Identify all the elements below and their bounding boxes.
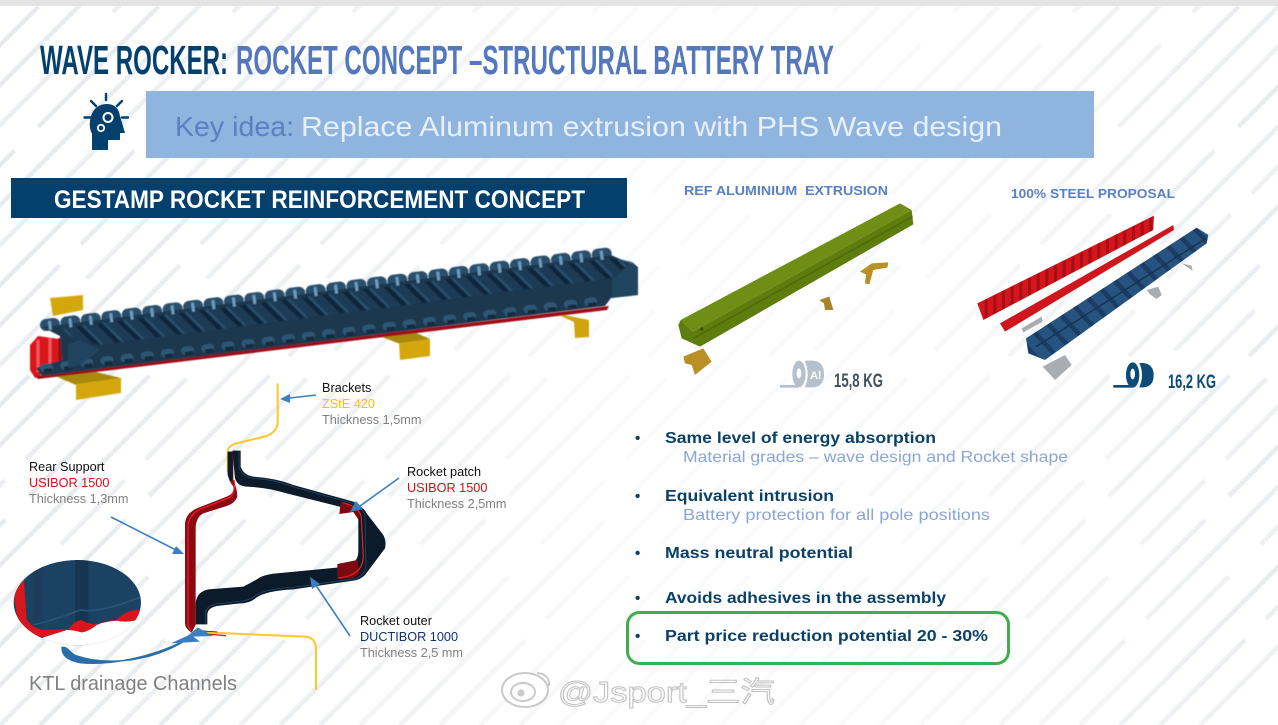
rocket reinforcement 3D render xyxy=(29,246,639,401)
weight: aluminium: 15,8 KG xyxy=(834,371,883,392)
watermark: @Jsport_三汽 xyxy=(558,676,775,709)
benefits list: Part price reduction potential 20 - 30% xyxy=(665,628,988,645)
curved arrow to drainage channel xyxy=(62,627,213,663)
bracket profile upper xyxy=(228,383,278,472)
label: KTL drainage channels: KTL drainage Channels xyxy=(29,673,237,695)
section banner xyxy=(11,178,627,218)
label: rear support: Rear Support xyxy=(29,460,105,474)
cross section diagram xyxy=(185,383,386,690)
benefits list xyxy=(635,430,1068,645)
label: rear support: USIBOR 1500 xyxy=(29,476,109,490)
benefits list: Avoids adhesives in the assembly xyxy=(665,590,946,607)
title: ROCKET CONCEPT –STRUCTURAL BATTERY TRAY xyxy=(236,37,834,83)
rocket patch section xyxy=(339,502,360,520)
heading: reference aluminium: REF ALUMINIUM EXTRUSION xyxy=(684,183,888,198)
benefits list: • xyxy=(635,488,640,505)
label: rocket outer: Thickness 2,5 mm xyxy=(360,646,463,660)
rear support section xyxy=(185,452,237,633)
benefits list: Material grades – wave design and Rocket shape xyxy=(683,449,1068,466)
label: rocket outer xyxy=(360,614,463,660)
icon: head with gears xyxy=(84,94,128,150)
title xyxy=(40,37,834,83)
title: WAVE ROCKER: xyxy=(40,37,228,83)
benefits list: Same level of energy absorption xyxy=(665,430,936,447)
key idea box: Replace Aluminum extrusion with PHS Wave design xyxy=(301,111,1002,142)
watermark xyxy=(502,673,775,709)
weight: aluminium roll icon: Al xyxy=(810,370,821,382)
key idea box: Key idea: xyxy=(175,111,294,142)
rocket outer section xyxy=(196,451,386,624)
aluminium extrusion render xyxy=(678,203,913,375)
benefits list: • xyxy=(635,545,640,562)
weight: steel: 16,2 KG xyxy=(1168,372,1216,393)
weight: aluminium roll icon xyxy=(780,361,824,388)
label: brackets: ZStE 420 xyxy=(322,397,375,411)
weight: steel roll icon xyxy=(1113,362,1154,388)
benefits list: Battery protection for all pole positions xyxy=(683,507,990,524)
benefits list: • xyxy=(635,628,640,645)
label: brackets xyxy=(322,381,421,427)
label: rocket outer: Rocket outer xyxy=(360,614,433,628)
label: brackets: Brackets xyxy=(322,381,371,395)
benefits list: • xyxy=(635,590,640,607)
label: rear support: Thickness 1,3mm xyxy=(29,492,128,506)
heading: steel proposal: 100% STEEL PROPOSAL xyxy=(1011,186,1175,201)
green highlight around price reduction xyxy=(628,612,1008,664)
label: brackets: Thickness 1,5mm xyxy=(322,413,421,427)
label: rocket outer: DUCTIBOR 1000 xyxy=(360,630,458,644)
bracket profile lower xyxy=(205,632,316,690)
callout arrows xyxy=(111,394,399,636)
label: rocket patch: Rocket patch xyxy=(407,465,481,479)
section banner: GESTAMP ROCKET REINFORCEMENT CONCEPT xyxy=(54,186,585,214)
steel proposal render xyxy=(977,216,1208,380)
key idea box xyxy=(146,91,1094,158)
benefits list: Equivalent intrusion xyxy=(665,488,834,505)
label: rear support xyxy=(29,460,128,506)
benefits list: Mass neutral potential xyxy=(665,545,853,562)
inset: KTL drainage detail xyxy=(13,560,141,647)
label: rocket patch: Thickness 2,5mm xyxy=(407,497,506,511)
label: rocket patch xyxy=(407,465,506,511)
benefits list: • xyxy=(635,430,640,447)
label: rocket patch: USIBOR 1500 xyxy=(407,481,487,495)
